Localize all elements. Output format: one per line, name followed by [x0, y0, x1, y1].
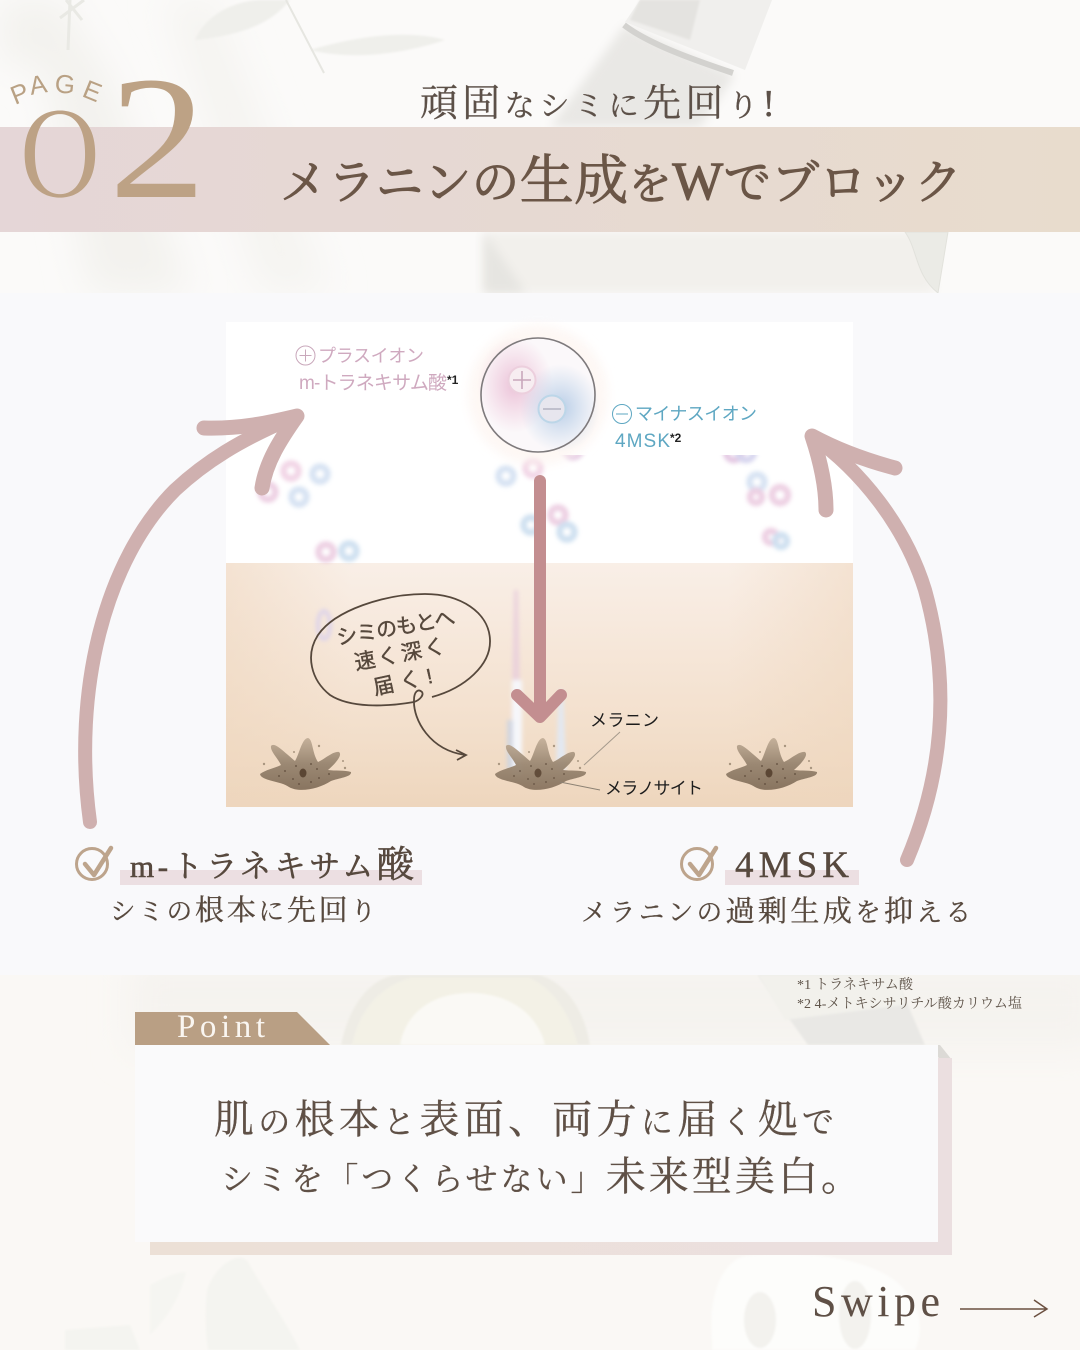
background photo: jar and bottle, bottom [340, 975, 950, 1347]
diagram: white upper area [226, 322, 853, 563]
minus ion label: *2 [670, 431, 682, 445]
point tag [135, 1009, 330, 1045]
check icon [76, 848, 111, 880]
melanin label [584, 711, 659, 765]
background photo: leaves and bottle, top [30, 0, 948, 293]
check icon [682, 848, 716, 880]
melanocyte right [726, 738, 817, 790]
speech bubble: シミのもとへ [335, 606, 457, 650]
page number 02: 2 [109, 41, 206, 236]
left curved arrow [85, 416, 297, 822]
footnotes: *1 トラネキサム酸 [797, 977, 913, 993]
feature left: m-tranexamic acid [76, 845, 422, 927]
header band [0, 127, 1080, 232]
point card [135, 1045, 952, 1255]
main heading: メラニンの生成をWでブロック [280, 151, 962, 211]
point text: 肌の根本と表面、両方に届く処で [214, 1097, 834, 1142]
feature left: m-tranexamic acid: シミの根本に先回り [110, 893, 376, 927]
point tag: Point [177, 1009, 265, 1045]
page number 02 [17, 41, 206, 236]
PAGE label: A [27, 68, 50, 101]
footnotes: *2 4-メトキシサリチル酸カリウム塩 [797, 996, 1022, 1012]
ion particles [260, 441, 788, 560]
diagram: skin layer [226, 563, 853, 807]
diagram [226, 322, 853, 807]
right curved arrow [812, 436, 940, 860]
bottle body [550, 25, 735, 127]
loofah [711, 1253, 920, 1350]
PAGE label: G [53, 68, 77, 100]
lens circle [468, 325, 608, 465]
plus ion label: プラスイオン [318, 346, 424, 366]
swipe: Swipe [812, 1277, 940, 1326]
minus ion label: 4MSK [615, 431, 670, 452]
speech bubble: 速く深く [353, 635, 447, 675]
point card: シミを「つくらせない」未来型美白。 [221, 1154, 861, 1199]
minus ion label [612, 404, 757, 452]
plus ion label: *1 [447, 373, 459, 387]
minus ion [538, 396, 566, 422]
feature right: 4MSK: 4MSK [735, 845, 849, 886]
minus ion label: マイナスイオン [635, 404, 757, 424]
PAGE label: E [79, 74, 106, 108]
arrow [960, 1300, 1047, 1317]
penetration streaks [318, 590, 566, 775]
middle panel background [0, 293, 1080, 975]
melanocyte left [260, 738, 351, 790]
melanocyte centre [495, 738, 586, 790]
footnotes [797, 977, 1022, 1012]
speech bubble [311, 594, 490, 760]
feature right: 4MSK: メラニンの過剰生成を抑える [581, 895, 971, 928]
plus ion label: m-トラネキサム酸 [299, 372, 447, 394]
plus ion [508, 366, 536, 394]
speech bubble: 届く! [371, 665, 435, 700]
PAGE label: P [6, 76, 33, 111]
melanin label: メラニン [590, 711, 659, 730]
swipe [812, 1277, 1047, 1326]
sub heading: 頑固なシミに先回り! [420, 83, 775, 125]
down arrow [517, 481, 561, 717]
melanocyte label [560, 779, 703, 798]
leaves [206, 1258, 300, 1350]
plus ion label [296, 346, 459, 394]
page number 02: 0 [17, 63, 103, 230]
melanocyte label: メラノサイト [605, 779, 703, 798]
feature left: m-tranexamic acid: m-トラネキサム酸 [130, 845, 414, 886]
feature right: 4MSK [581, 845, 971, 928]
